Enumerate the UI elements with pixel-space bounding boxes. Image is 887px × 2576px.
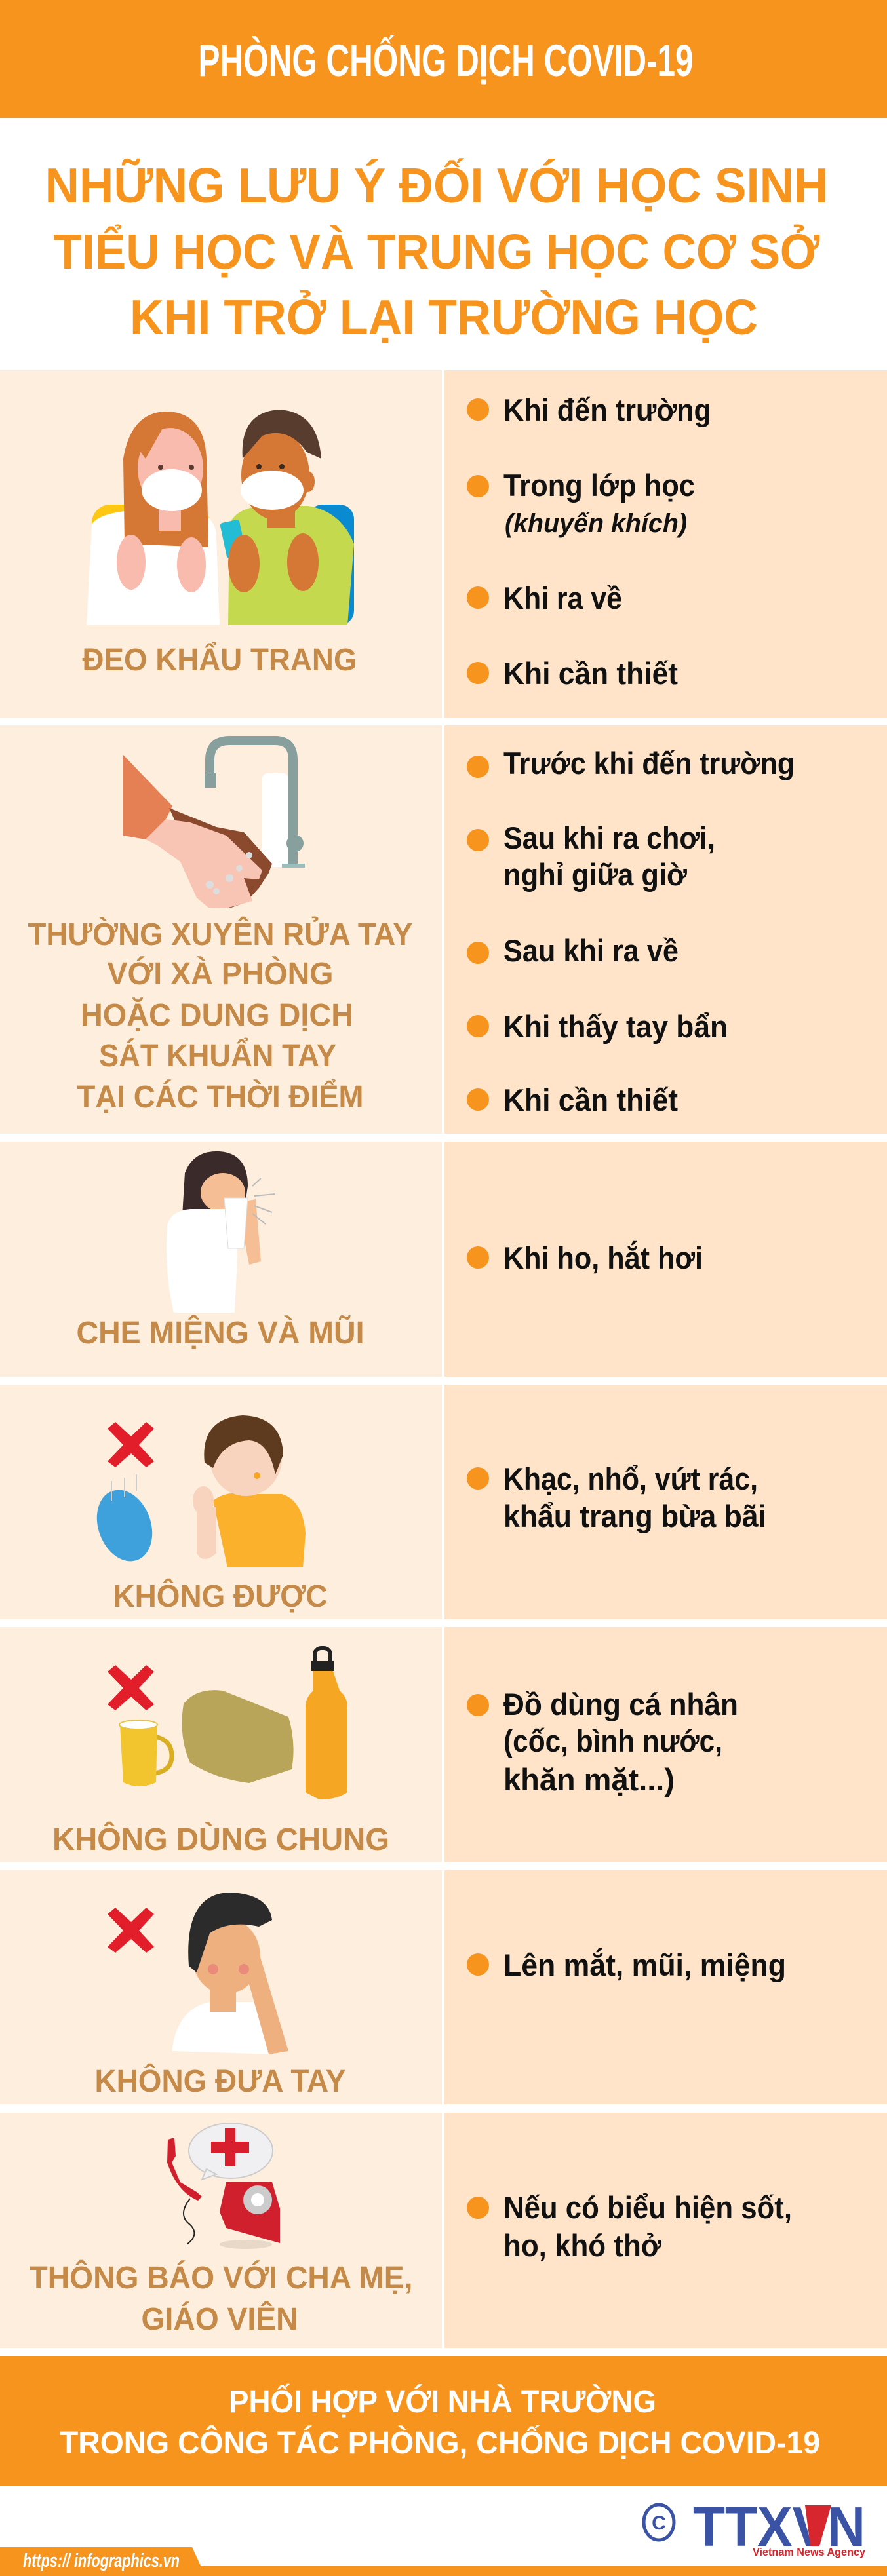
icon: red X — [108, 1665, 154, 1710]
icon: red telephone — [167, 2123, 280, 2249]
icon: dropped mask — [87, 1474, 162, 1569]
bullet: personal items — [467, 1687, 738, 1797]
icon: red X — [108, 1422, 154, 1467]
bullet list: hand washing: Khi thấy tay bẩn — [503, 1009, 728, 1044]
label: THƯỜNG XUYÊN RỬA TAY — [28, 916, 413, 1115]
header bar — [0, 0, 887, 118]
icon: red X — [108, 1908, 154, 1953]
label: KHÔNG ĐƯỢC: KHÔNG ĐƯỢC — [113, 1578, 328, 1614]
url tab: https:// infographics.vn — [23, 2550, 180, 2571]
panel: do not spit row — [87, 1415, 766, 1614]
bullet list: hand washing: nghỉ giữa giờ — [503, 857, 688, 892]
icon: students with masks — [87, 410, 354, 625]
bullet: face: Lên mắt, mũi, miệng — [503, 1948, 786, 1982]
bullet: cough: Khi ho, hắt hơi — [503, 1240, 703, 1275]
label: THÔNG BÁO VỚI CHA MẸ, GIÁO VIÊN — [29, 2259, 413, 2337]
bullet list: hand washing: Trước khi đến trường — [503, 746, 795, 780]
header bar: PHÒNG CHỐNG DỊCH COVID-19 — [198, 35, 694, 86]
footer banner: TRONG CÔNG TÁC PHÒNG, CHỐNG DỊCH COVID-19 — [60, 2425, 820, 2461]
bullet list: mask — [467, 393, 711, 691]
bullet: spitting — [467, 1461, 766, 1533]
icon: coughing boy — [193, 1415, 306, 1567]
panel: do not share row — [52, 1648, 738, 1857]
bullet list: hand washing: Khi cần thiết — [503, 1083, 678, 1117]
panel: mask row — [83, 393, 711, 691]
bullet list: mask: Trong lớp học — [503, 468, 695, 503]
label: THƯỜNG XUYÊN RỬA TAY: VỚI XÀ PHÒNG — [108, 955, 333, 991]
panel: hand washing row — [28, 740, 795, 1117]
label: THƯỜNG XUYÊN RỬA TAY: HOẶC DUNG DỊCH — [81, 997, 353, 1033]
icon: washing hands — [123, 740, 305, 908]
panel: do not touch face row — [94, 1893, 786, 2099]
bullet list: mask: Khi cần thiết — [503, 656, 678, 691]
title: KHI TRỞ LẠI TRƯỜNG HỌC — [130, 290, 758, 345]
bullet: symptoms: ho, khó thở — [503, 2228, 662, 2263]
icon: boy rubbing eyes — [172, 1893, 288, 2054]
bullet list: hand washing: Sau khi ra về — [503, 933, 679, 968]
bullet list: hand washing: Sau khi ra chơi, — [503, 820, 715, 855]
label: THÔNG BÁO VỚI CHA MẸ, GIÁO VIÊN: GIÁO VIÊN — [142, 2301, 298, 2337]
panel: notify parents row — [29, 2123, 792, 2337]
bullet: personal items: khăn mặt...) — [503, 1762, 675, 1797]
footer banner — [0, 2356, 887, 2486]
bullet list: hand washing — [467, 746, 795, 1117]
bullet: symptoms — [467, 2190, 792, 2263]
bullet list: mask: Khi ra về — [503, 581, 622, 615]
label: KHÔNG DÙNG CHUNG: KHÔNG DÙNG CHUNG — [52, 1821, 389, 1857]
bullet: personal items: Đồ dùng cá nhân — [503, 1687, 738, 1721]
bullet: spitting: Khạc, nhổ, vứt rác, — [503, 1461, 758, 1496]
label: ĐEO KHẨU TRANG: ĐEO KHẨU TRANG — [83, 642, 357, 678]
logo: TTXVN: Vietnam News Agency — [753, 2546, 866, 2558]
url tab — [0, 2547, 887, 2576]
bullet: personal items: (cốc, bình nước, — [503, 1723, 722, 1758]
logo: TTXVN: C — [652, 2512, 666, 2534]
bullet list: mask: (khuyến khích) — [505, 509, 687, 538]
panel: cover mouth row — [76, 1151, 703, 1351]
title: TIỂU HỌC VÀ TRUNG HỌC CƠ SỞ — [54, 224, 820, 279]
panel: row backgrounds — [0, 370, 887, 2348]
label: THƯỜNG XUYÊN RỬA TAY: TẠI CÁC THỜI ĐIỂM — [77, 1079, 363, 1115]
logo: TTXVN: TTXVN — [693, 2496, 865, 2558]
footer banner: PHỐI HỢP VỚI NHÀ TRƯỜNG — [229, 2383, 656, 2419]
title — [45, 158, 829, 345]
icon: woman sneezing — [167, 1151, 275, 1313]
bullet: symptoms: Nếu có biểu hiện sốt, — [503, 2190, 792, 2225]
label: CHE MIỆNG VÀ MŨI: CHE MIỆNG VÀ MŨI — [76, 1315, 365, 1351]
label: THƯỜNG XUYÊN RỬA TAY: SÁT KHUẨN TAY — [99, 1038, 336, 1073]
icon: mug towel bottle — [119, 1648, 347, 1799]
bullet list: mask: Khi đến trường — [503, 393, 711, 427]
bullet: spitting: khẩu trang bừa bãi — [503, 1499, 766, 1533]
label: THƯỜNG XUYÊN RỬA TAY: THƯỜNG XUYÊN RỬA TAY — [28, 916, 413, 952]
title: NHỮNG LƯU Ý ĐỐI VỚI HỌC SINH — [45, 158, 829, 213]
label: THÔNG BÁO VỚI CHA MẸ, GIÁO VIÊN: THÔNG BÁO VỚI CHA MẸ, — [29, 2259, 413, 2296]
label: KHÔNG ĐƯA TAY: KHÔNG ĐƯA TAY — [94, 2063, 346, 2099]
